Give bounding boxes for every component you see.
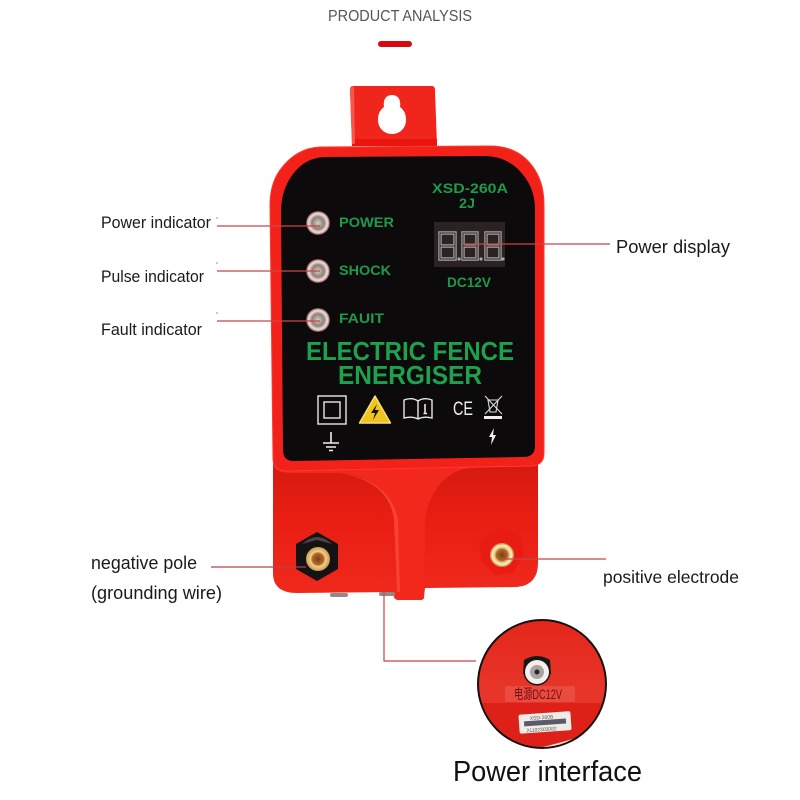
leader line stray dots xyxy=(216,217,218,314)
leader line: negative pole xyxy=(211,566,306,568)
model number: XSD-260A xyxy=(432,181,508,196)
label: fault indicator: Fault indicator xyxy=(101,321,202,339)
title: PRODUCT ANALYSIS xyxy=(328,8,472,25)
panel label: POWER: POWER xyxy=(339,214,394,230)
bottom studs xyxy=(330,592,395,597)
panel heading line 2: ENERGISER xyxy=(338,362,482,390)
device body upper shell xyxy=(270,146,544,471)
LED: shock xyxy=(306,259,330,283)
title accent bar xyxy=(378,41,412,47)
device black panel xyxy=(281,156,535,461)
icon: WEEE crossed bin xyxy=(484,396,502,419)
leader line: positive electrode xyxy=(503,558,606,560)
label: power indicator: Power indicator xyxy=(101,214,211,232)
seven segment display xyxy=(434,222,505,267)
icon: lightning bolt xyxy=(489,428,496,445)
icon: CE mark: CE xyxy=(453,399,473,420)
leader line: fault indicator xyxy=(217,320,320,322)
label: negative pole: negative pole xyxy=(91,552,197,573)
LED: fault xyxy=(306,308,330,332)
panel heading line 1: ELECTRIC FENCE xyxy=(306,338,514,366)
leader line: pulse indicator xyxy=(217,270,320,272)
icon: double insulation square xyxy=(318,396,346,424)
leader line: power display xyxy=(463,243,610,245)
inset caption: Power interface xyxy=(453,756,642,788)
LED: power xyxy=(306,211,330,235)
voltage: DC12V xyxy=(447,274,492,290)
leader line: power indicator xyxy=(217,225,320,227)
device body lower section xyxy=(273,460,538,600)
inset voltage tag background xyxy=(505,686,575,702)
inset DC jack xyxy=(523,656,551,686)
inset voltage text: 电源DC12V xyxy=(514,686,562,702)
leader line: power interface xyxy=(384,592,476,661)
icon: earth ground xyxy=(323,432,339,450)
device hanging tab xyxy=(350,86,437,146)
negative terminal xyxy=(296,532,338,581)
label: pulse indicator: Pulse indicator xyxy=(101,268,204,286)
rating: 2J xyxy=(459,195,475,211)
inset seam shading xyxy=(478,703,608,748)
panel label: SHOCK: SHOCK xyxy=(339,262,391,278)
label: power display: Power display xyxy=(616,236,731,257)
icon: high voltage warning xyxy=(360,396,390,423)
inset: power interface close-up xyxy=(478,620,608,750)
panel label: FAUIT: FAUIT xyxy=(339,310,384,326)
label: grounding wire: (grounding wire) xyxy=(91,582,222,603)
icon: read manual book xyxy=(404,399,432,419)
inset serial label: 21102303082 xyxy=(526,726,557,734)
inset white edge xyxy=(543,738,574,747)
infographic canvas xyxy=(92,10,738,782)
label: positive electrode: positive electrode xyxy=(603,567,739,587)
inset serial label: XSD-260B xyxy=(530,714,554,722)
inset serial label xyxy=(518,711,572,735)
device: electric fence energiser xyxy=(270,86,544,600)
positive terminal xyxy=(479,527,524,575)
